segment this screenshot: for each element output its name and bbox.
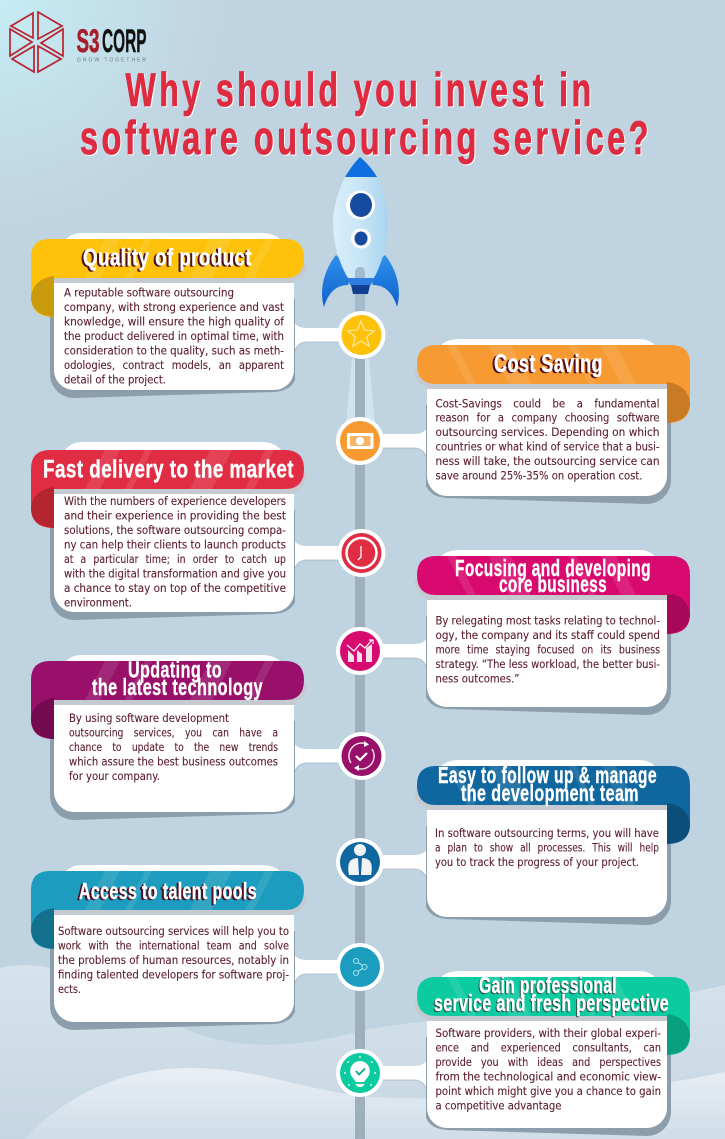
rocket nozzle [347,278,374,285]
heading: Quality of product [83,244,252,272]
connector [293,952,345,987]
body text: Cost-Savings could be a fundamental [436,398,660,410]
body text: finding talented developers for software proj- [58,968,289,982]
icon: share nodes [336,943,384,991]
card shape [31,655,307,820]
body text: odologies, contract models, an apparent [64,359,285,372]
body text: outsourcing services. Depending on which [436,426,660,439]
icon: banknote [336,417,384,465]
body text: By relegating most tasks relating to technol- [436,614,660,628]
body text [64,286,285,386]
connector [376,636,428,671]
logo: S3 Corp: GROW TOGETHER [77,58,146,64]
body text: consideration to the quality, such as meth- [64,344,284,358]
rocket nose cone [345,157,377,177]
heading: Fast delivery to the market [43,456,294,484]
logo: S3 Corp [10,12,146,72]
body text: outsourcing services, you can have a [69,726,278,740]
heading: the development team [461,780,639,806]
body text: strategy. “The less workload, the better busi- [436,658,660,671]
heading: core business [499,571,607,597]
body text: which assure the best business outcomes [69,756,278,768]
body text: Software outsourcing services will help you to [58,925,289,938]
body text: With the numbers of experience developers [64,495,286,508]
body text: company, with strong experience and vast [64,301,285,314]
icon: logo hexagon [10,12,63,72]
body text: solutions, the software outsourcing compa- [64,524,286,537]
body text: work with the international team and solve [58,940,289,952]
connector [376,426,428,461]
body text: point which might give you a chance to gain [436,1085,661,1098]
connector [293,741,345,776]
card shape [414,339,690,504]
body text [436,1027,661,1112]
body text: more time staying focused on its business [436,644,660,656]
panel: access to talent pools [31,865,384,1030]
icon: growth chart [336,627,384,675]
body text [69,712,278,783]
body text: and their experience in providing the best [64,510,287,522]
timeline: vertical bar and beam [346,355,375,1139]
heading: Cost Saving [494,350,603,378]
icon: star [338,311,386,359]
body text: the problems of human resources, notably in [58,954,289,967]
body text: A reputable software outsourcing [64,286,234,300]
heading [92,656,263,700]
icon: clock [338,529,386,577]
icon: light bulb check [336,1049,384,1097]
body text [435,827,659,869]
connector [293,538,345,573]
connector [376,847,428,882]
body text: provide you with ideas and perspectives [436,1056,661,1069]
body text: In software outsourcing terms, you will have [435,827,659,840]
body text: save around 25%-35% on operation cost. [436,470,642,482]
body text: Software providers, with their global experi- [436,1027,661,1040]
body text: with the digital transformation and give you [64,568,286,580]
rocket body [333,177,388,278]
body text: ny can help their clients to launch products [64,538,286,552]
body text: reason for a company choosing software [436,412,660,424]
heading: the latest technology [92,674,263,700]
text: CORP [102,23,146,59]
body text [436,398,660,482]
body text: for your company. [69,770,160,783]
heading [434,972,669,1016]
body text: ogy, the company and its staff could spend [436,629,660,642]
card shape [31,233,307,398]
panel: fast delivery to the market [31,442,386,620]
card shape [414,971,690,1136]
card shape [31,442,307,620]
body text: detail of the project. [64,374,166,386]
body text: ness will take, the outsourcing service can [436,455,660,468]
rocket exhaust bar [355,267,365,312]
body text [436,614,660,686]
body text: ness outcomes.” [436,672,520,686]
panel: focusing and developing core business [336,550,690,715]
connector [376,1058,428,1093]
body text: a chance to stay on top of the competitive [64,582,286,595]
rocket [322,157,399,312]
panel: cost saving [336,339,690,504]
icon: team person [336,838,384,886]
heading: Access to talent pools [79,878,257,904]
rocket windows [346,190,375,220]
logo wordmark: S3 [76,23,100,59]
icon: refresh check [338,732,386,780]
body text: from the technological and economic view- [436,1070,661,1084]
body text [64,495,287,610]
body text: at a particular time; in order to catch up [64,553,286,566]
panel: easy to follow up and manage the development team [336,760,690,925]
heading [438,762,657,806]
heading: Gain professional [479,972,617,998]
body text [58,925,289,996]
rocket fins [322,255,352,307]
body text: By using software development [69,712,230,725]
panel: updating to the latest technology [31,655,386,820]
card shape [31,865,307,1030]
panel: gain professional service and fresh perspective [336,971,690,1136]
title [80,63,652,164]
connector [293,320,345,355]
body text: environment. [64,596,132,610]
heading [455,555,651,597]
card shape [414,550,690,715]
body text: knowledge, will ensure the high quality of [64,316,285,328]
body text: a plan to show all processes. This will help [435,842,659,854]
heading: Updating to [128,656,222,682]
body text: chance to update to the new trends [69,741,278,754]
card shape [414,760,690,925]
body text: the product delivered in optimal time, with [64,330,284,343]
body text: countries or what kind of service that a busi- [436,440,660,454]
body text: you to track the progress of your project. [435,856,639,869]
panel: quality of product [31,233,386,398]
body text: ects. [58,983,81,996]
body text: ence and experienced consultants, can [436,1042,661,1054]
body text: a competitive advantage [436,1100,562,1112]
